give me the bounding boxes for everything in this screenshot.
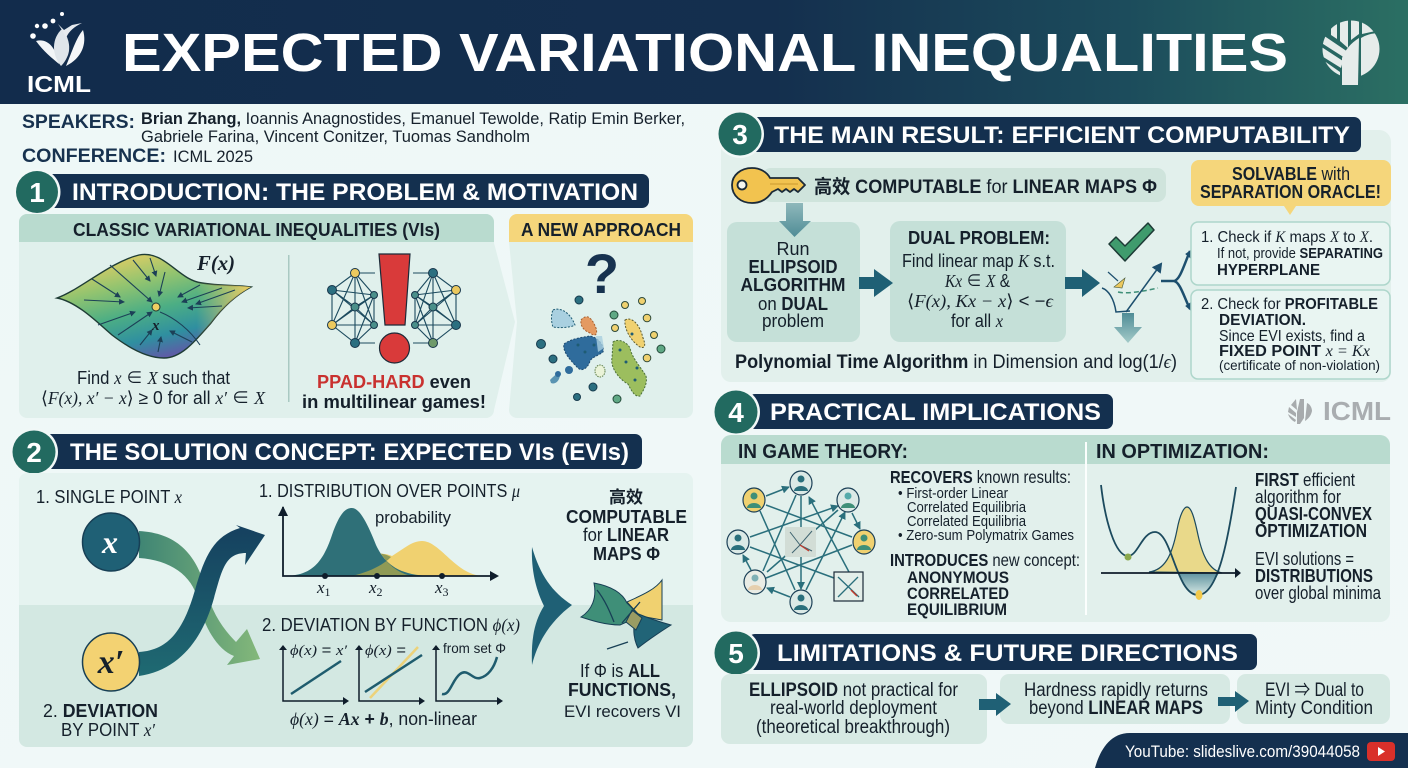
text: optimization results: QUASI-CONVEX [1255, 504, 1372, 524]
text: all functions: EVI recovers VI [564, 702, 681, 721]
text: game theory results: Correlated Equilibria [907, 513, 1027, 530]
panel: the solution concept [19, 473, 693, 747]
box: run ellipsoid: problem [762, 311, 824, 331]
speakers block: CONFERENCE: [22, 146, 166, 167]
chart: distribution over points: x [369, 578, 377, 597]
text: game theory results: EQUILIBRIUM [907, 600, 1007, 619]
text: deviation by point [43, 701, 158, 740]
box: ellipsoid limitation [721, 674, 987, 744]
box: ellipsoid limitation: ELLIPSOID not practical for [749, 680, 959, 701]
chart: distribution over points: x [317, 578, 325, 597]
text: optimization results: DISTRIBUTIONS [1255, 566, 1373, 586]
panel: main result [716, 110, 1391, 382]
text: PPAD-hard: in multilinear games! [302, 392, 486, 412]
chart: distribution over points: 1. DISTRIBUTION OVER POINTS μ [259, 481, 520, 501]
text: optimization results: OPTIMIZATION [1255, 521, 1367, 541]
icon: folded leaf shape [581, 580, 671, 649]
section 5 heading: 5 [728, 638, 744, 669]
arrow: to hardness [979, 693, 1011, 716]
section 2 heading: THE SOLUTION CONCEPT: EXPECTED VIs (EVIs) [70, 439, 629, 466]
panel: practical implications [721, 435, 1390, 622]
text: deviation by point: 2. DEVIATION [43, 701, 158, 721]
text: optimization results: algorithm for [1255, 487, 1341, 507]
text: optimization results: over global minima [1255, 583, 1382, 603]
chart: quasi-convex function [1101, 485, 1241, 600]
box: run ellipsoid: on DUAL [758, 294, 828, 314]
box: dual problem: for all x [951, 311, 1003, 331]
box: check profitable deviation [1191, 290, 1390, 379]
icon: deviation point x prime: x′ [97, 644, 124, 681]
text: game theory results: • Zero-sum Polymatrix Games [898, 527, 1074, 544]
chart: deviation by function: from set Φ [443, 640, 506, 656]
callout: solvable with separation oracle [1191, 160, 1391, 215]
text: computable for linear maps: 高效 [609, 487, 643, 507]
arrow: to dual [859, 269, 893, 297]
section 4 heading: 4 [728, 397, 744, 428]
text: deviation by point: BY POINT x′ [61, 720, 156, 740]
text: optimization results [1255, 470, 1382, 603]
text: game theory results: Correlated Equilibria [907, 499, 1027, 516]
box: run ellipsoid [727, 222, 860, 342]
chart: scattered clusters [536, 296, 665, 403]
box: check maps: HYPERPLANE [1217, 262, 1320, 279]
icon: deviation point x prime [82, 633, 140, 691]
title: EXPECTED VARIATIONAL INEQUALITIES [122, 23, 1288, 83]
section 1 heading [14, 168, 649, 216]
section 4 heading: PRACTICAL IMPLICATIONS [770, 399, 1101, 426]
icon: ICML grey logo [1288, 396, 1391, 426]
text: problem definition: ⟨F(x), x′ − x⟩ ≥ 0 for all x′ ∈ X [41, 388, 266, 409]
chart: distribution over points: 1 [325, 585, 331, 599]
section 5 heading: LIMITATIONS & FUTURE DIRECTIONS [777, 640, 1238, 667]
text: game theory results [890, 467, 1080, 619]
text: PPAD-hard: PPAD-HARD even [317, 372, 471, 392]
text: problem definition [41, 368, 266, 409]
arrow: fork to checks [1161, 249, 1193, 312]
arrow: down from key [779, 203, 811, 237]
arrow: big chevron [532, 547, 572, 665]
box: dual problem [890, 221, 1066, 342]
box: check profitable deviation: (certificate of non-violation) [1219, 357, 1380, 373]
chart: distribution over points [259, 481, 520, 599]
section 3 heading: THE MAIN RESULT: EFFICIENT COMPUTABILITY [774, 122, 1350, 149]
icon: network with exclamation [328, 254, 460, 363]
chart: deviation by function: ϕ(x) = x′ [290, 642, 348, 659]
icon: key [732, 168, 805, 203]
box: check profitable deviation: 2. Check for PROFITABLE [1201, 296, 1378, 313]
text: all functions: If Φ is ALL [580, 661, 660, 681]
icon: play button [1367, 742, 1395, 761]
chart: vector field surface [57, 251, 251, 358]
box: hardness: Hardness rapidly returns [1024, 680, 1208, 701]
icon: tree logo right [1322, 20, 1380, 85]
text: polynomial time: Polynomial Time Algorithm in Dimension and log(1/ϵ) [735, 352, 1177, 373]
text: game theory results: RECOVERS known results: [890, 467, 1071, 487]
speakers block: SPEAKERS: [22, 112, 135, 133]
icon: check mark [1109, 223, 1154, 261]
section 4 heading [712, 388, 1113, 436]
callout: solvable with separation oracle: SEPARATION ORACLE! [1200, 182, 1381, 202]
icon: ICML logo left: ICML [27, 71, 91, 97]
chart: vector field surface: F(x) [196, 251, 235, 275]
arrow: green deviation arrow [139, 531, 260, 665]
text: all functions: FUNCTIONS, [568, 680, 676, 700]
box: dual problem: Find linear map K s.t. [902, 251, 1055, 271]
text: game theory results: INTRODUCES new concept: [890, 550, 1080, 570]
box: minty condition: Minty Condition [1255, 698, 1373, 719]
box: dual problem: DUAL PROBLEM: [908, 228, 1050, 248]
arrow: to minty [1218, 691, 1249, 712]
chart: deviation by function: ϕ(x) = Ax + b, non-linear [290, 709, 477, 730]
panel: a new approach [509, 214, 693, 418]
chart: deviation by function: 2. DEVIATION BY FUNCTION ϕ(x) [262, 615, 520, 636]
text: computable for linear maps: COMPUTABLE [566, 507, 687, 527]
box: run ellipsoid: ELLIPSOID [748, 257, 838, 277]
box: hardness: beyond LINEAR MAPS [1029, 698, 1203, 719]
chart: distribution over points: x [435, 578, 443, 597]
chart: vector field surface: x [151, 318, 160, 334]
section 5 heading [712, 629, 1257, 677]
icon: point x: x [101, 524, 118, 560]
text: optimization results: EVI solutions = [1255, 549, 1354, 569]
box: check maps: 1. Check if K maps X to X. [1201, 229, 1373, 246]
chart: deviation by function: ϕ(x) = [365, 642, 406, 659]
text: single point: 1. SINGLE POINT x [36, 487, 182, 507]
box: ellipsoid limitation: (theoretical breakthrough) [756, 717, 950, 738]
chart: distribution over points: probability [375, 508, 451, 527]
footer: youtube link: YouTube: slideslive.com/39044058 [1125, 742, 1360, 761]
heading: in game theory: IN GAME THEORY: [738, 441, 908, 463]
icon: ICML grey logo: ICML [1323, 396, 1391, 426]
icon: point x [82, 513, 140, 571]
box: check profitable deviation: FIXED POINT x = Kx [1219, 343, 1370, 360]
section 1 heading: 1 [29, 177, 45, 208]
callout: computable band [762, 168, 1166, 202]
speakers block: ICML 2025 [173, 147, 253, 166]
chart: player network [727, 471, 875, 614]
speakers block [22, 109, 685, 167]
text: computable for linear maps: MAPS Φ [593, 544, 660, 564]
callout: computable band: 高效 COMPUTABLE for LINEAR MAPS Φ [814, 175, 1157, 198]
arrow: blue distribution arrow [139, 525, 265, 676]
icon: question mark: ? [585, 242, 619, 305]
section 1 heading: INTRODUCTION: THE PROBLEM & MOTIVATION [72, 179, 638, 206]
text: all functions [564, 661, 681, 721]
panel: classic variational inequalities [19, 214, 515, 418]
text: PPAD-hard [302, 372, 486, 412]
speakers block: Gabriele Farina, Vincent Conitzer, Tuomas Sandholm [141, 127, 530, 146]
text: game theory results: • First-order Linear [898, 485, 1008, 502]
heading: in optimization: IN OPTIMIZATION: [1096, 441, 1269, 463]
box: minty condition [1237, 674, 1390, 724]
chart: distribution over points: 2 [377, 585, 383, 599]
box: check maps [1191, 222, 1390, 285]
section 3 heading: 3 [732, 119, 748, 150]
text: game theory results: ANONYMOUS [907, 568, 1009, 587]
text: computable for linear maps: for LINEAR [583, 525, 669, 545]
section 2 heading: 2 [26, 437, 42, 468]
box: hardness [1000, 674, 1230, 724]
footer: youtube link [1095, 733, 1408, 768]
box: dual problem: Kx ∈ X & [944, 271, 1010, 291]
box: run ellipsoid: ALGORITHM [740, 275, 846, 295]
panel: classic variational inequalities: CLASSIC VARIATIONAL INEQUALITIES (VIs) [73, 220, 440, 240]
icon: ICML logo left [27, 12, 91, 97]
section 3 heading [716, 110, 1361, 158]
header banner [0, 0, 1408, 104]
chart: deviation by function [262, 615, 520, 730]
text: optimization results: FIRST efficient [1255, 470, 1355, 490]
callout: solvable with separation oracle: SOLVABLE with [1232, 164, 1350, 184]
box: check maps: If not, provide SEPARATING [1217, 245, 1383, 262]
section 2 heading [10, 428, 642, 476]
box: check profitable deviation: Since EVI exists, find a [1219, 328, 1365, 345]
text: computable for linear maps [566, 487, 687, 564]
chart: distribution over points: 3 [443, 585, 449, 599]
box: dual problem: ⟨F(x), Kx − x⟩ < −ϵ [907, 291, 1054, 312]
arrow: to check [1065, 269, 1100, 297]
box: check profitable deviation: DEVIATION. [1219, 312, 1306, 329]
panel: a new approach: A NEW APPROACH [521, 220, 681, 240]
box: minty condition: EVI ⇒ Dual to [1265, 680, 1364, 701]
text: game theory results: CORRELATED [907, 584, 1009, 603]
speakers block: Brian Zhang, Ioannis Anagnostides, Emanuel Tewolde, Ratip Emin Berker, [141, 109, 685, 128]
icon: oracle hyperplane diagram [1102, 264, 1161, 343]
box: ellipsoid limitation: real-world deployment [770, 698, 938, 719]
box: run ellipsoid: Run [776, 239, 810, 259]
text: problem definition: Find x ∈ X such that [77, 368, 230, 388]
